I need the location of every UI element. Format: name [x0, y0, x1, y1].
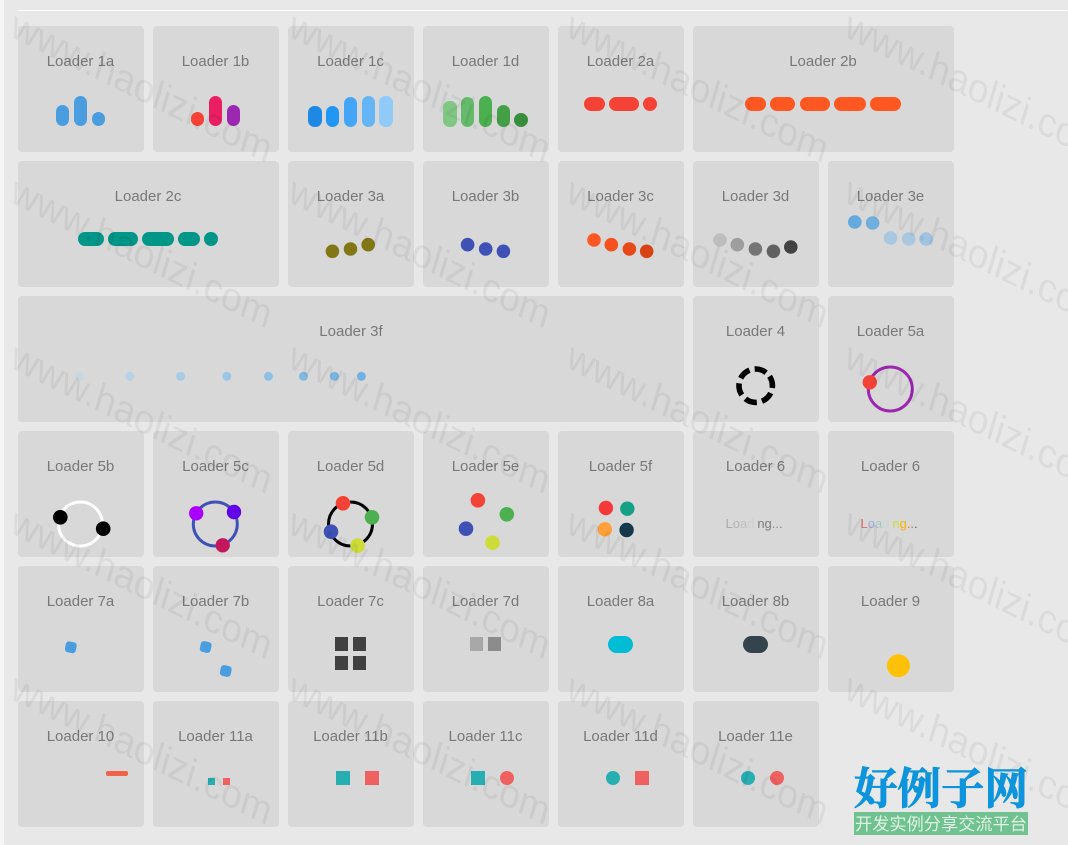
heading: Loader 11e	[718, 728, 793, 745]
watermark: www.haolizi.com	[562, 498, 833, 669]
watermark: www.haolizi.com	[562, 167, 833, 338]
heading: Loader 1b	[182, 53, 249, 70]
icon: rotated square	[64, 641, 77, 654]
heading: Loader 8b	[722, 593, 789, 610]
watermark: www.haolizi.com	[562, 664, 833, 834]
panel: Loader 8a	[558, 566, 684, 692]
heading: Loader 10	[47, 728, 114, 745]
icon: circle and square	[606, 771, 649, 785]
panel: Loader 11c	[423, 701, 549, 827]
watermark: www.haolizi.com	[284, 2, 555, 172]
panel: Loader 7b	[153, 566, 279, 692]
loading text: Loading...	[860, 516, 918, 531]
panel: Loader 11b	[288, 701, 414, 827]
icon: square grid	[335, 637, 366, 670]
heading: Loader 7d	[452, 593, 519, 610]
panel: Loader 2a	[558, 26, 684, 152]
logo	[854, 766, 1028, 835]
icon: pill	[608, 636, 633, 653]
icon: dots	[848, 215, 933, 246]
panel: Loader 6 colour	[828, 431, 954, 557]
icon: pills	[584, 97, 657, 111]
panel: Loader 3c	[558, 161, 684, 287]
panel: Loader 7d	[423, 566, 549, 692]
icon: dashed ring	[733, 363, 779, 409]
watermark: www.haolizi.com	[284, 167, 555, 338]
icon: squares	[470, 637, 501, 651]
watermark: www.haolizi.com	[6, 664, 277, 834]
icon: pills	[745, 97, 901, 111]
heading: Loader 7a	[47, 593, 115, 610]
heading: Loader 1d	[452, 53, 519, 70]
heading: Loader 3f	[319, 323, 384, 340]
panel: Loader 10	[18, 701, 144, 827]
icon: bars	[308, 96, 393, 127]
watermark: www.haolizi.com	[6, 2, 277, 172]
panel: Loader 3f	[18, 296, 684, 422]
panel: Loader 2c	[18, 161, 279, 287]
watermark: www.haolizi.com	[6, 333, 277, 503]
panel: Loader 8b	[693, 566, 819, 692]
heading: Loader 11d	[583, 728, 658, 745]
panel: Loader 11e	[693, 701, 819, 827]
icon: ring with dots	[53, 502, 110, 546]
heading: Loader 4	[726, 323, 785, 340]
icon: bars	[56, 96, 105, 126]
icon: dots	[713, 233, 798, 258]
heading: Loader 6	[861, 458, 920, 475]
logo title: 好例子网	[854, 766, 1028, 814]
icon: dots	[461, 238, 510, 258]
icon: ring with dots	[189, 502, 241, 552]
panel: Loader 5b	[18, 431, 144, 557]
panel: Loader 1b	[153, 26, 279, 152]
panel: Loader 11d	[558, 701, 684, 827]
watermark: www.haolizi.com	[6, 498, 277, 669]
heading: Loader 5e	[452, 458, 519, 475]
panel: Loader 4	[693, 296, 819, 422]
icon: dots	[587, 233, 654, 258]
watermark: www.haolizi.com	[284, 664, 555, 834]
heading: Loader 3c	[587, 188, 654, 205]
icon: rotated squares	[199, 640, 232, 678]
heading: Loader 2b	[789, 53, 857, 70]
panel: Loader 5e	[423, 431, 549, 557]
heading: Loader 1c	[317, 53, 384, 70]
panel: Loader 3e	[828, 161, 954, 287]
heading: Loader 1a	[47, 53, 115, 70]
watermark: www.haolizi.com	[284, 498, 555, 669]
icon: dots	[459, 493, 514, 550]
icon: dots	[598, 501, 634, 537]
heading: Loader 9	[861, 593, 920, 610]
heading: Loader 2c	[115, 188, 182, 205]
loading text: Loading...	[726, 516, 783, 531]
heading: Loader 5d	[317, 458, 384, 475]
panel: Loader 5c	[153, 431, 279, 557]
icon: pill	[743, 636, 768, 653]
panel: Loader 2b	[693, 26, 954, 152]
heading: Loader 5a	[857, 323, 925, 340]
watermark: www.haolizi.com	[6, 167, 277, 338]
icon: dots	[75, 372, 366, 381]
panel: Loader 3a	[288, 161, 414, 287]
heading: Loader 3b	[452, 188, 519, 205]
heading: Loader 6	[726, 458, 785, 475]
icon: pills	[78, 232, 218, 246]
icon: circles	[741, 771, 784, 785]
watermark: www.haolizi.com	[562, 2, 833, 172]
heading: Loader 11b	[313, 728, 388, 745]
watermark: www.haolizi.com	[562, 333, 833, 503]
heading: Loader 11c	[449, 728, 523, 745]
watermark: www.haolizi.com	[284, 333, 555, 503]
panel: Loader 3b	[423, 161, 549, 287]
panel: Loader 7c	[288, 566, 414, 692]
icon: bars	[443, 96, 528, 127]
icon: bars	[191, 96, 240, 126]
heading: Loader 8a	[587, 593, 655, 610]
heading: Loader 7c	[317, 593, 384, 610]
icon: ring with dot	[863, 367, 912, 411]
panel: Loader 3d	[693, 161, 819, 287]
panel: Loader 1d	[423, 26, 549, 152]
panel: Loader 9	[828, 566, 954, 692]
icon: squares	[336, 771, 379, 785]
icon: square and circle	[471, 771, 514, 785]
panel: Loader 1a	[18, 26, 144, 152]
icon: small squares	[208, 778, 230, 785]
logo band	[854, 812, 1028, 835]
heading: Loader 7b	[182, 593, 249, 610]
heading: Loader 3a	[317, 188, 385, 205]
panel: Loader 5f	[558, 431, 684, 557]
heading: Loader 2a	[587, 53, 655, 70]
heading: Loader 5b	[47, 458, 114, 475]
panel: Loader 6 grey	[693, 431, 819, 557]
heading: Loader 5c	[182, 458, 249, 475]
icon: yellow ball	[887, 654, 910, 677]
icon: ring with dots	[324, 496, 379, 553]
panel: Loader 7a	[18, 566, 144, 692]
icon: dots	[326, 238, 375, 258]
heading: Loader 11a	[178, 728, 254, 745]
heading: Loader 3e	[857, 188, 924, 205]
panel: Loader 5a	[828, 296, 954, 422]
heading: Loader 3d	[722, 188, 789, 205]
icon: bar	[106, 771, 128, 776]
panel: Loader 1c	[288, 26, 414, 152]
heading: Loader 5f	[589, 458, 653, 475]
panel: Loader 11a	[153, 701, 279, 827]
logo tagline: 开发实例分享交流平台	[855, 815, 1027, 834]
panel: Loader 5d	[288, 431, 414, 557]
